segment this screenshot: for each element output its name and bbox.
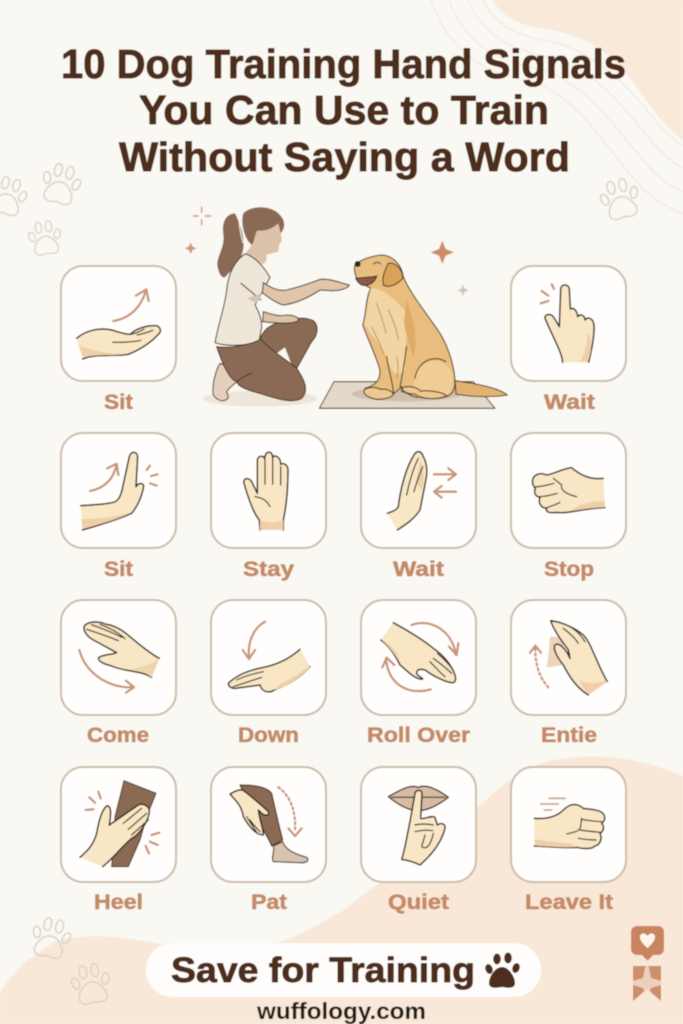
title: You Can Use to Train: [139, 87, 549, 133]
label: Down: [238, 724, 299, 747]
card: Pat: [211, 767, 326, 914]
icon: hand patting leg: [80, 781, 159, 867]
label: Wait: [393, 558, 444, 581]
hand on knee: [263, 312, 298, 323]
label: Sit: [104, 391, 133, 414]
icon: hand on lower leg with dotted arrow: [230, 785, 308, 863]
nose and eye: [355, 261, 361, 267]
hero illustration: woman signalling to golden retriever: [185, 207, 507, 408]
label: Stop: [544, 558, 594, 581]
decorative paw prints: [0, 160, 644, 1006]
shoe: [213, 363, 239, 401]
icon: finger on lips: [388, 786, 448, 865]
label: Roll Over: [367, 724, 470, 747]
mouth: [356, 276, 377, 285]
body: [354, 255, 455, 399]
face and neck: [245, 223, 282, 264]
ponytail: [217, 213, 244, 277]
card: Quiet: [361, 767, 476, 914]
icon: hand with paper and dotted arrow: [530, 621, 607, 695]
icon: raised index finger: [541, 284, 594, 362]
label: Come: [87, 724, 149, 747]
bottom peach wave: [0, 756, 683, 1024]
fur strokes: [372, 303, 398, 378]
icon: flat hand pointing down: [228, 622, 310, 692]
card: Sit (palm up): [61, 266, 176, 414]
floor shadow and mat: [203, 382, 495, 408]
label: Stay: [243, 558, 294, 581]
icon: upright flat hand with arrow: [81, 452, 158, 530]
shirt: [215, 254, 270, 345]
card: Stay: [211, 433, 326, 581]
card: Wait (index finger): [511, 266, 626, 414]
icon: solid paw: [484, 952, 521, 988]
card: Wait (side hand): [361, 433, 476, 581]
card: Entie: [511, 600, 626, 747]
title: Without Saying a Word: [119, 134, 570, 180]
icon: heart badge: [631, 926, 664, 961]
icon: fist with motion lines: [534, 798, 605, 849]
icon: bookmark: [626, 958, 668, 1001]
label: Pat: [251, 891, 287, 914]
ear: [383, 263, 403, 286]
tail: [455, 381, 507, 397]
front legs and paws: [387, 347, 407, 393]
card: Come: [61, 600, 176, 747]
sparkles: [185, 207, 469, 296]
card: Stop: [511, 433, 626, 581]
icon: hand with circular arrows: [381, 623, 458, 691]
label: Quiet: [388, 891, 449, 914]
title: 10 Dog Training Hand Signals: [61, 41, 626, 87]
woman: [213, 207, 349, 401]
hair: [242, 207, 284, 245]
card: Down: [211, 600, 326, 747]
pants: [217, 318, 317, 401]
label: Sit: [104, 558, 133, 581]
icon: palm up hand with arrow: [77, 289, 160, 359]
label: Wait: [544, 391, 595, 414]
save button pill: [146, 943, 541, 997]
icon: hand pointing left with sweep arrow: [79, 622, 159, 693]
title: [61, 41, 626, 180]
card: Leave It: [511, 767, 626, 914]
contour lines: [431, 0, 683, 214]
save text: Save for Training: [171, 951, 475, 990]
top-right peach corner shape: [492, 0, 683, 140]
icon: fist: [533, 468, 605, 513]
extended arm: [262, 279, 349, 305]
dog: [354, 255, 507, 399]
website url: wuffology.com: [256, 998, 426, 1024]
card: Heel: [61, 767, 176, 914]
icon: open palm: [244, 452, 288, 530]
label: Heel: [94, 891, 143, 914]
label: Leave It: [525, 891, 613, 914]
chest fur: [364, 288, 413, 374]
card: Sit (upright hand): [61, 433, 176, 581]
icon: side-on flat hand with arrows: [387, 452, 456, 530]
label: Entie: [541, 724, 597, 747]
haunch: [413, 361, 453, 397]
card: Roll Over: [361, 600, 476, 747]
